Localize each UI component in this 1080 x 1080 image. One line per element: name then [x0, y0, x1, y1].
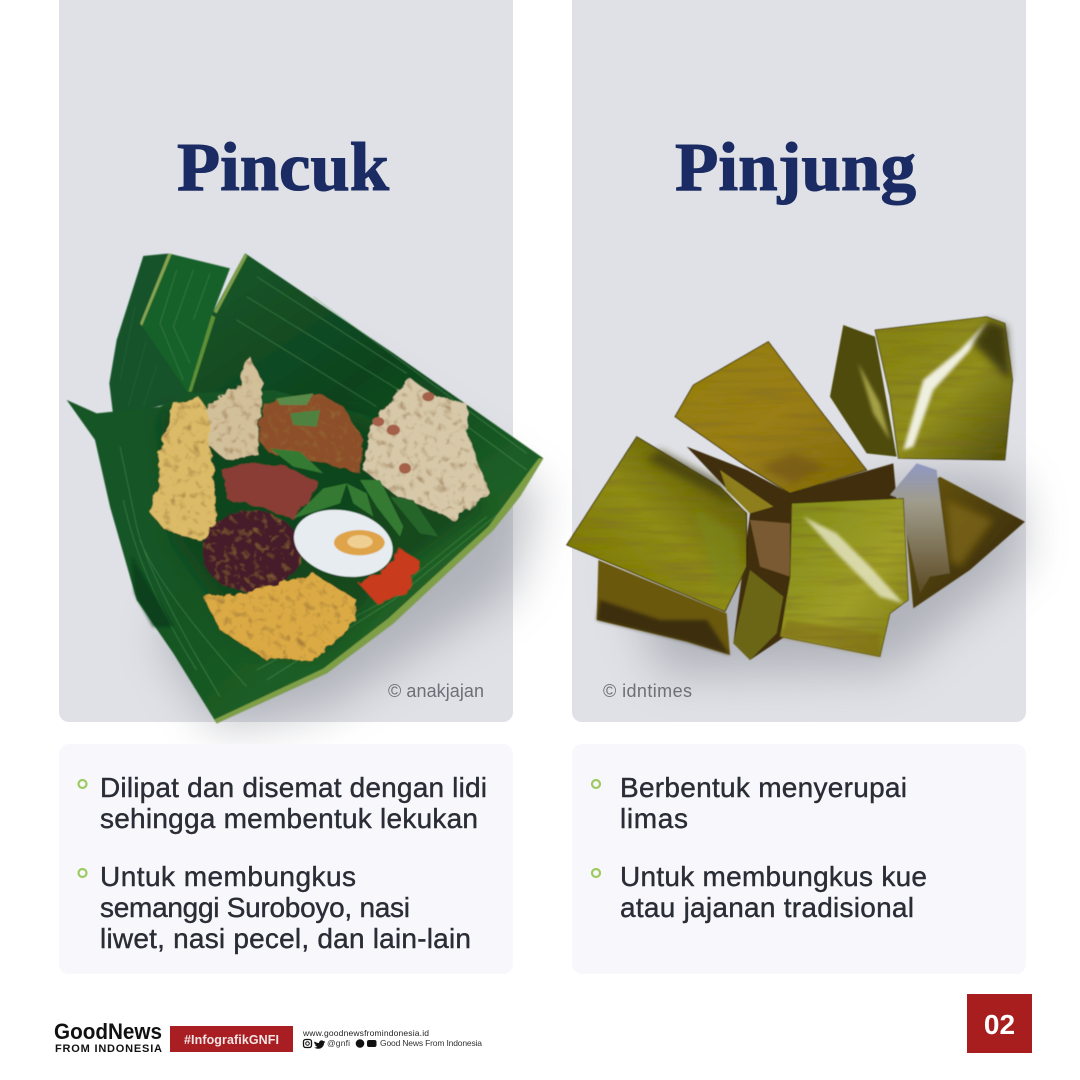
panel: pincuk description [59, 744, 513, 974]
silver fold [890, 463, 950, 593]
heading: Pincuk: Pincuk [177, 129, 390, 205]
main leaf [67, 253, 543, 723]
upper centre parcel [675, 342, 867, 493]
logo: GoodNews from Indonesia: GoodNews [54, 1019, 162, 1044]
corn patty [203, 573, 357, 660]
upper leaf fold [188, 253, 543, 497]
heading: Pinjung: Pinjung [675, 129, 916, 205]
bullet text 1: Dilipat dan disemat dengan lidi [100, 772, 487, 803]
bullet text 1: Berbentuk menyerupai [620, 772, 907, 803]
centre bottom parcel [780, 498, 908, 657]
photo: pincuk banana leaf with food [67, 253, 543, 730]
middle leaf [140, 253, 230, 393]
beef [222, 463, 320, 520]
bullet text 1: limas [620, 803, 688, 834]
bullet text 1: sehingga membentuk lekukan [100, 803, 478, 834]
logo: GoodNews from Indonesia [54, 1019, 162, 1055]
leaf shadow [160, 357, 540, 730]
bullet 1 [78, 780, 86, 788]
corn fritter left [149, 398, 217, 540]
panel: pinjung image card [572, 0, 1026, 722]
food shadow [160, 413, 487, 650]
lower left parcel [597, 560, 730, 655]
big left parcel [567, 437, 747, 612]
credit: anakjajan: © anakjajan [388, 681, 484, 701]
back leaf [109, 253, 200, 417]
icon: instagram [304, 1040, 312, 1048]
salted egg [288, 501, 399, 586]
bullet 1 [592, 780, 600, 788]
basil leaves [270, 448, 438, 537]
page number badge [967, 994, 1032, 1053]
top right parcel [875, 317, 1013, 460]
website and social handles: Good News From Indonesia [380, 1038, 482, 1048]
icon: facebook [356, 1039, 364, 1048]
tag: InfografikGNFI: #InfografikGNFI [184, 1033, 279, 1047]
rempeyek centre [208, 355, 263, 460]
bullet text 2 [100, 861, 471, 954]
bullet text 2: liwet, nasi pecel, dan lain-lain [100, 923, 471, 954]
bullet text 2: atau jajanan tradisional [620, 892, 914, 923]
food [149, 355, 490, 660]
bullet text 2 [620, 861, 927, 923]
bullet text 1 [100, 772, 487, 834]
bullet 2 [592, 869, 600, 877]
logo: GoodNews from Indonesia: FROM INDONESIA [55, 1043, 162, 1055]
green beans and peanuts [277, 392, 434, 474]
sambal [358, 548, 420, 603]
website and social handles: @gnfi [327, 1038, 350, 1048]
page number badge: 02 [984, 1009, 1015, 1040]
credit: idntimes: © idntimes [603, 681, 692, 701]
panel: pinjung description [572, 744, 1026, 974]
photo: pinjung banana leaf parcels [567, 317, 1025, 673]
icon: twitter [314, 1039, 325, 1049]
bullet text 2: Untuk membungkus [100, 861, 356, 892]
website and social handles: www.goodnewsfromindonesia.id [302, 1028, 429, 1038]
right dark parcel [903, 477, 1025, 608]
parcels shadow [627, 473, 1023, 673]
tag: InfografikGNFI [170, 1026, 293, 1052]
sprouts [258, 393, 363, 473]
leaf veins [120, 277, 527, 697]
panel: pincuk image card [59, 0, 513, 722]
bullet text 2: semanggi Suroboyo, nasi [100, 892, 410, 923]
black rice [202, 511, 301, 592]
bullet text 1 [620, 772, 907, 834]
rempeyek right [363, 378, 490, 520]
website and social handles [302, 1028, 482, 1049]
centre brown fold [687, 447, 897, 660]
back top right parcel [830, 325, 897, 457]
icon: youtube [367, 1040, 376, 1047]
bullet text 2: Untuk membungkus kue [620, 861, 927, 892]
bullet 2 [78, 869, 86, 877]
